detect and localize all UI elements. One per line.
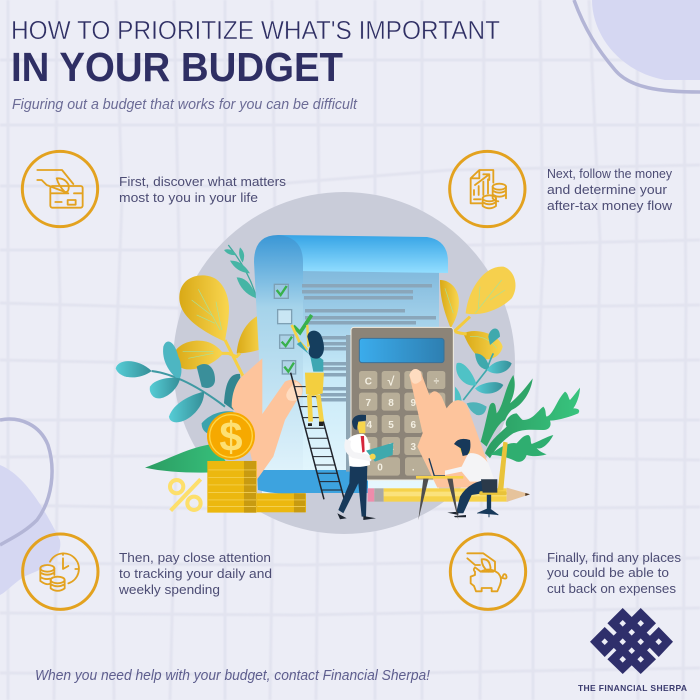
logo: endless knot xyxy=(590,608,673,674)
calculator: C xyxy=(365,376,372,387)
icon: hand with credit card xyxy=(22,151,98,227)
calculator: ÷ xyxy=(434,376,440,387)
calculator: 0 xyxy=(377,463,383,474)
pointing hand xyxy=(409,369,497,488)
calculator: 2 xyxy=(388,442,394,453)
text: step four: Finally, find any places xyxy=(547,550,681,565)
text: step three: weekly spending xyxy=(118,582,220,597)
calculator: √ xyxy=(388,374,395,388)
text: step two xyxy=(547,166,672,213)
calculator: 3 xyxy=(411,442,417,453)
title line 1: HOW TO PRIORITIZE WHAT'S IMPORTANT xyxy=(11,15,500,45)
calculator xyxy=(346,327,453,480)
calculator: 1 xyxy=(367,442,373,453)
logo wordmark: THE FINANCIAL SHERPA xyxy=(578,683,687,693)
scroll document xyxy=(254,235,448,494)
text: step one: most to you in your life xyxy=(119,190,258,205)
standing man xyxy=(337,415,393,520)
calculator: . xyxy=(412,463,415,474)
document text lines xyxy=(302,284,436,402)
calculator: 9 xyxy=(411,398,417,409)
left hand, coins, checklist and woman xyxy=(170,284,344,513)
coin stacks xyxy=(257,493,306,512)
calculator: 5 xyxy=(388,420,394,431)
right plants xyxy=(440,267,580,462)
ladder xyxy=(291,373,344,499)
text: step two: and determine your xyxy=(547,182,668,197)
icon: clock with coins xyxy=(23,534,98,609)
calculator: 7 xyxy=(366,398,372,409)
icon: piggy bank xyxy=(450,534,526,609)
text: step one: First, discover what matters xyxy=(119,174,286,189)
percent sign xyxy=(170,479,201,511)
left hand, coins, checklist and woman: $ xyxy=(219,413,243,460)
text: step two: Next, follow the money xyxy=(547,166,672,181)
decorative blob: top right xyxy=(574,0,700,92)
seated man at desk xyxy=(416,439,508,520)
hand holding the document xyxy=(232,358,303,480)
text: step two: after-tax money flow xyxy=(547,198,672,213)
footer call to action: When you need help with your budget, contact Financial Sherpa! xyxy=(35,668,430,684)
text: step four: you could be able to xyxy=(547,565,669,580)
calculator: 8 xyxy=(388,398,394,409)
check boxes xyxy=(274,284,296,374)
text: step four xyxy=(547,550,681,596)
text: step three xyxy=(118,550,272,597)
text: step three: Then, pay close attention xyxy=(119,550,271,565)
subtitle: Figuring out a budget that works for you can be difficult xyxy=(12,97,358,113)
title line 2: IN YOUR BUDGET xyxy=(11,44,343,90)
icon: report with coins xyxy=(450,151,525,227)
pencil, pointing hand and figures xyxy=(337,369,530,520)
dollar coin xyxy=(207,412,255,460)
text: step three: to tracking your daily and xyxy=(119,566,272,581)
background circle xyxy=(173,192,515,534)
woman on ladder xyxy=(292,325,324,426)
central illustration xyxy=(116,192,580,534)
calculator: 4 xyxy=(367,420,373,431)
calculator: 6 xyxy=(411,420,417,431)
decorative blob: bottom left xyxy=(0,419,60,595)
pencil xyxy=(368,488,530,502)
text: step one xyxy=(119,174,286,205)
left plants xyxy=(116,245,263,473)
text: step four: cut back on expenses xyxy=(547,581,676,596)
